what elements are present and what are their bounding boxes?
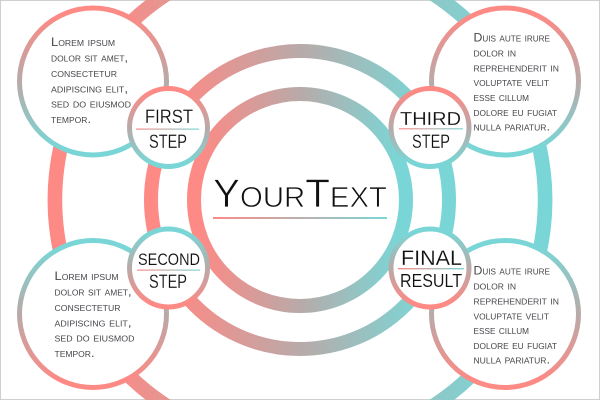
- panel: bottom-right text circle: esse cillum: [474, 323, 529, 337]
- panel: bottom-left text circle: Lorem ipsum: [54, 269, 119, 283]
- panel: bottom-right text circle: Duis aute irure: [474, 264, 550, 278]
- panel: top-left text circle: tempor.: [51, 112, 91, 126]
- panel: bottom-left text circle: dolor sit amet,: [54, 285, 132, 299]
- panel: bottom-left text circle: sed do eiusmod: [54, 331, 135, 345]
- panel: top-right text circle: [432, 8, 578, 155]
- panel: top-right text circle: voluptate velit: [474, 75, 549, 89]
- panel: top-right text circle: nulla pariatur.: [474, 120, 550, 134]
- title: YourText: YOURTEXT: [213, 172, 387, 216]
- step badge: second step: STEP: [149, 272, 187, 293]
- step badge: first step: STEP: [149, 132, 187, 153]
- step badge: third step: THIRD: [400, 108, 461, 129]
- inner ring: [194, 94, 406, 306]
- panel: bottom-right text circle: nulla pariatur.: [474, 353, 550, 367]
- panel: bottom-right text circle: dolor in: [474, 279, 516, 293]
- panel: bottom-right text circle: [432, 240, 578, 388]
- panel: top-right text circle: Duis aute irure: [474, 31, 550, 45]
- step badge: first step: FIRST: [145, 106, 193, 128]
- panel: bottom-left text circle: [20, 240, 166, 388]
- step badge: first step: [130, 88, 208, 166]
- panel: top-right text circle: reprehenderit in: [474, 60, 559, 74]
- step badge: third step: STEP: [412, 132, 450, 153]
- panel: bottom-right text circle: dolore eu fugiat: [474, 338, 557, 352]
- step badge: final result: FINAL: [401, 247, 462, 270]
- panel: top-right text circle: esse cillum: [474, 90, 529, 104]
- panel: top-right text circle: dolor in: [474, 46, 516, 60]
- step badge: second step: [130, 229, 208, 307]
- panel: bottom-left text circle: adipiscing elit,: [54, 315, 132, 329]
- panel: top-left text circle: [20, 8, 166, 155]
- panel: top-left text circle: Lorem ipsum: [51, 35, 115, 49]
- panel: bottom-left text circle: consectetur: [54, 300, 121, 314]
- step badge: final result: RESULT: [400, 271, 462, 291]
- panel: top-left text circle: consectetur: [51, 66, 117, 80]
- panel: top-left text circle: dolor sit amet,: [51, 50, 128, 64]
- panel: top-left text circle: adipiscing elit,: [51, 81, 128, 95]
- middle ring: [151, 51, 449, 349]
- step badge: final result: [391, 229, 469, 307]
- panel: top-right text circle: dolore eu fugiat: [474, 105, 557, 119]
- panel: bottom-right text circle: voluptate velit: [474, 308, 549, 322]
- panel: top-left text circle: sed do eiusmod: [51, 97, 131, 111]
- step badge: second step: SECOND: [138, 251, 200, 269]
- panel: bottom-right text circle: reprehenderit in: [474, 294, 559, 308]
- panel: bottom-left text circle: tempor.: [54, 346, 94, 360]
- step badge: third step: [391, 88, 469, 166]
